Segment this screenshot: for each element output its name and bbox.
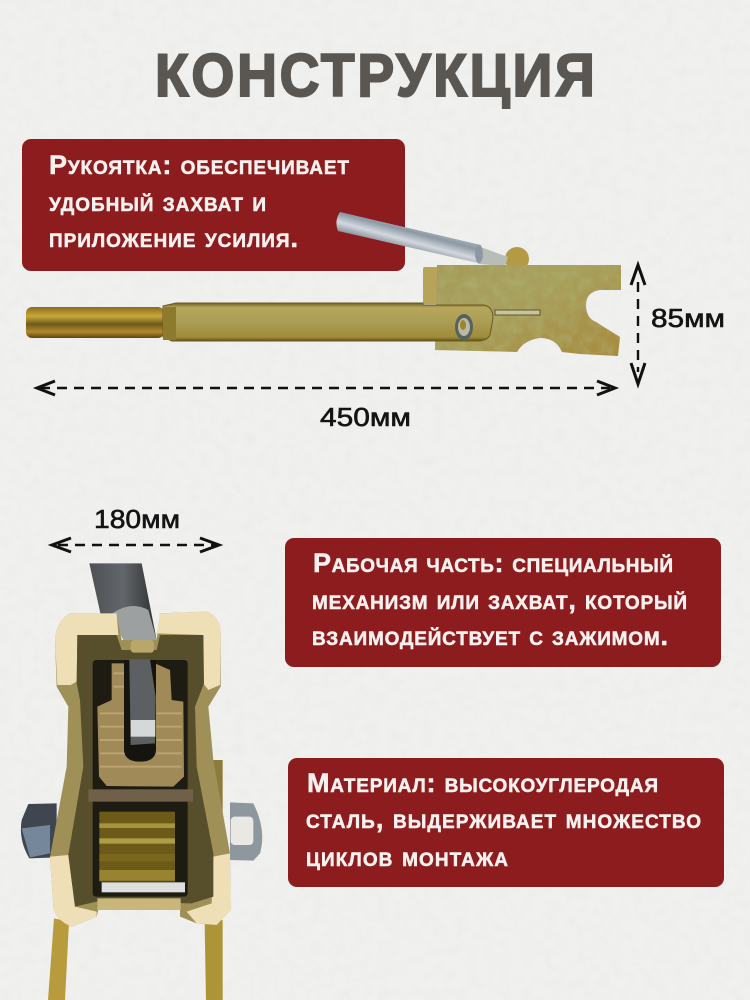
- square bar: [163, 303, 493, 341]
- label: 450mm: 450мм: [320, 402, 411, 432]
- side plate right: [210, 760, 223, 857]
- bottom edge strip: [97, 898, 181, 910]
- forked plate: [435, 265, 621, 356]
- panel: material description: [288, 758, 724, 887]
- arrow: width 180mm: [52, 538, 219, 552]
- cream corner: bottom left: [50, 855, 97, 927]
- slotted block: [97, 663, 184, 787]
- nut right: [230, 802, 262, 861]
- outer frame: [50, 612, 231, 927]
- pin: [131, 640, 154, 653]
- grey lever: [89, 563, 157, 640]
- photo: tool side view: [26, 212, 621, 356]
- panel: working part description: [285, 538, 721, 667]
- steel handle lever: [336, 212, 529, 271]
- arrow: length 450mm: [37, 381, 615, 395]
- steel tongue: [129, 659, 156, 745]
- label: 180mm: 180мм: [94, 504, 180, 534]
- rods: [48, 918, 69, 1000]
- slot in plate: [495, 310, 540, 315]
- panel: working part description: Рабочая часть: специальный: [313, 548, 673, 578]
- panel: handle description: Рукоятка: обеспечивает: [49, 150, 349, 180]
- inner frame: [68, 635, 213, 907]
- inner cavity: [93, 660, 188, 897]
- panel: handle description: приложение усилия.: [49, 223, 298, 253]
- panel: material description: сталь, выдерживает множество: [306, 804, 701, 834]
- panel: handle description: удобный захват и: [49, 187, 266, 217]
- label: 85mm: 85мм: [651, 303, 725, 333]
- block highlights: [100, 673, 182, 767]
- bolt head: [455, 314, 473, 340]
- panel: working part description: взаимодействует с зажимом.: [312, 621, 668, 651]
- arrow: height 85mm: [631, 265, 645, 384]
- cross bar: [88, 789, 193, 802]
- rear block: [423, 267, 439, 304]
- title: КОНСТРУКЦИЯ: [155, 43, 595, 110]
- panel: material description: циклов монтажа: [306, 842, 508, 872]
- cream corner: bottom right: [187, 853, 231, 925]
- photo: tool front view: [21, 563, 262, 1000]
- white gap: [102, 882, 185, 892]
- nut left: [21, 803, 57, 858]
- cream corner: top right: [157, 612, 221, 690]
- cream corner: top left: [55, 613, 118, 685]
- slot: [124, 660, 156, 762]
- panel: handle description: [22, 139, 405, 271]
- panel: material description: Материал: высокоуглеродая: [307, 768, 658, 798]
- weld: [110, 606, 157, 640]
- panel: working part description: механизм или захват, который: [312, 585, 687, 615]
- cylindrical grip: [26, 307, 164, 338]
- gear: [99, 812, 175, 882]
